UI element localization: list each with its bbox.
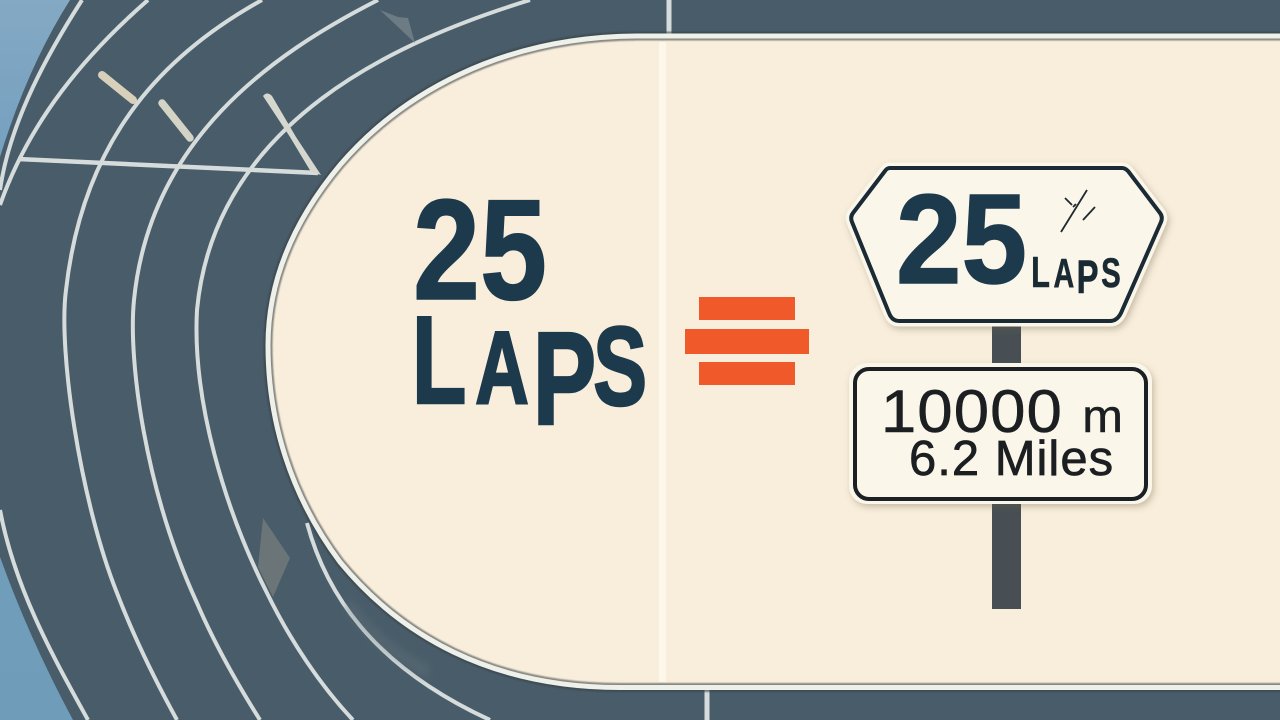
top sign: A (1053, 251, 1074, 296)
infield center line (659, 42, 666, 682)
top sign: 25 (896, 168, 1027, 310)
bottom sign: 10000 (881, 379, 1063, 446)
faint flag lower (258, 518, 290, 597)
equals sign (685, 297, 809, 385)
faint flag top (380, 10, 415, 43)
start line (18, 159, 318, 173)
lane marker 3 (263, 94, 321, 175)
big label: 25 Laps: 25 (413, 171, 547, 330)
big label: 25 Laps (412, 171, 647, 453)
bottom sign: 6.2 Miles (909, 432, 1114, 486)
bottom sign (849, 363, 1152, 504)
signpost (849, 168, 1162, 609)
lane marker 2 (162, 103, 190, 138)
lane lines (0, 0, 707, 720)
big label: 25 Laps: L (412, 291, 466, 429)
big label: 25 Laps: S (593, 304, 647, 429)
bottom sign: m (1082, 391, 1123, 443)
post (992, 320, 1021, 609)
top sign (851, 168, 1162, 321)
big label: 25 Laps: A (475, 311, 529, 426)
track light patch (345, 597, 430, 680)
top sign: P (1077, 250, 1099, 303)
big label: 25 Laps: P (533, 306, 596, 453)
lane marker 1 (102, 75, 133, 100)
infield (268, 36, 1280, 688)
top sign: S (1101, 249, 1121, 296)
top sign: L (1031, 249, 1050, 297)
